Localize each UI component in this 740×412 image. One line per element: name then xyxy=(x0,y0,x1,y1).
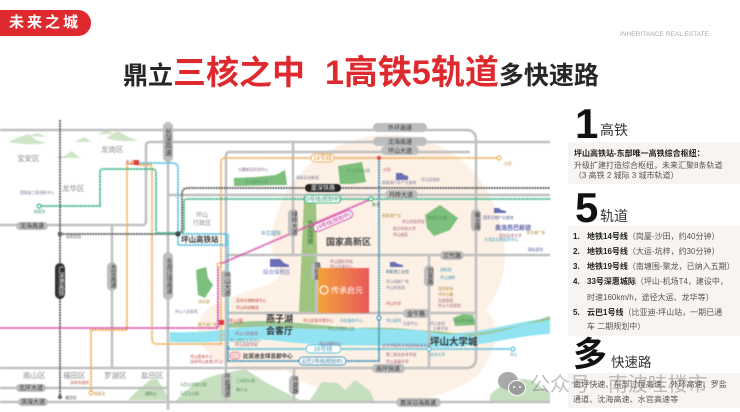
major place names xyxy=(181,224,531,348)
small point-of-interest labels: 南方科技大学 xyxy=(393,226,416,231)
highway labels: 北环大道 xyxy=(19,384,43,392)
small point-of-interest labels: 坪山实验学校 xyxy=(402,219,425,224)
small point-of-interest labels: 坪山校区 xyxy=(393,232,408,237)
icon: wechat xyxy=(498,372,526,396)
small point-of-interest labels: 坪山人民医院 xyxy=(438,303,461,308)
big number 5: 5 xyxy=(575,184,598,231)
small point-of-interest labels: 坪山森林公园 xyxy=(245,179,268,184)
district labels: 宝安区 xyxy=(17,153,40,163)
small point-of-interest labels: 坪山人民医院 xyxy=(175,309,198,314)
small point-of-interest labels: 大康学校 xyxy=(433,326,448,331)
line list: 时速160km/h，途径大运、龙华等） xyxy=(587,293,714,302)
description box: （3 高铁 2 城际 3 城市轨道） xyxy=(574,171,678,180)
small point-of-interest labels: 创新园 xyxy=(440,267,452,272)
district labels: 坪山 xyxy=(196,211,208,219)
small point-of-interest labels: 深圳技术大学 xyxy=(499,233,522,238)
small point-of-interest labels: 塘朗山 xyxy=(145,391,157,396)
highway labels: 坪山大道 xyxy=(388,147,412,155)
district labels xyxy=(17,144,211,380)
small point-of-interest labels: 新能源汽车产业基地 xyxy=(382,180,416,185)
small point-of-interest labels: 新能源工业园 xyxy=(386,269,409,274)
big character 多: 多 xyxy=(573,336,607,374)
small point-of-interest labels: 坪山科创集团 xyxy=(236,305,259,310)
line name tags xyxy=(55,154,354,365)
line list xyxy=(568,226,740,336)
small point-of-interest labels: 坪山奥体中心 xyxy=(190,354,213,359)
major place names: 会客厅 xyxy=(266,325,293,336)
map xyxy=(0,119,551,410)
highway labels: 金牛路 xyxy=(407,310,425,318)
small point-of-interest labels: 坪山人民医院 xyxy=(235,331,258,336)
district labels: 南山区 xyxy=(23,370,46,380)
highway labels: 丹梓大道 xyxy=(389,191,413,199)
line name tags: 16号线 xyxy=(314,345,332,353)
small point-of-interest labels: 深圳技术大学 xyxy=(408,343,431,348)
small point-of-interest labels: 岗厦北 xyxy=(94,391,106,396)
description box: 通道、沈海高速、水官高速等 xyxy=(573,395,678,404)
small point-of-interest labels: 马峦山公园 xyxy=(180,391,199,396)
highway labels: 聚龙路 xyxy=(473,212,480,231)
line name tags: 14号线 xyxy=(313,154,332,162)
highway labels: 锦绣路 xyxy=(313,261,320,281)
line name tags: 19号线(规划中) xyxy=(314,210,352,232)
small point-of-interest labels: 福田站 xyxy=(65,395,77,400)
BYD bubble: 比亚迪全球总部中心 xyxy=(243,352,293,360)
highway labels: 东部过境高速 xyxy=(165,257,172,295)
line list: 5. xyxy=(573,308,580,317)
small point-of-interest labels: 国家生物产业基地 xyxy=(483,215,514,220)
small point-of-interest labels: 龙光城广场 xyxy=(526,230,545,235)
district labels: 龙华区 xyxy=(62,183,85,193)
small point-of-interest labels: 沙田 xyxy=(504,161,512,166)
line name tags: 厦深铁路 xyxy=(311,184,335,192)
description box xyxy=(568,373,740,408)
metro line 14 xyxy=(91,158,499,393)
small point-of-interest labels: 坪山老街 xyxy=(430,321,445,326)
map: 大运 xyxy=(125,159,135,166)
small point-of-interest labels: 坪山区政府 xyxy=(421,177,440,182)
river xyxy=(170,316,550,347)
BYD bubble xyxy=(230,352,293,360)
small point-of-interest labels: 聚龙山公园 xyxy=(428,215,447,220)
line list: 2. xyxy=(573,247,580,256)
major place names: 奥浩芭巴斯德 xyxy=(495,224,531,232)
major place names: 燕子湖 xyxy=(266,313,293,324)
highway labels: 坪盐通道 xyxy=(223,372,230,398)
small point-of-interest labels xyxy=(20,161,545,400)
panel: high-speed rail xyxy=(568,100,740,184)
line list: 车 二期规划中） xyxy=(587,322,645,331)
watermark text: 公众号 · 南波哇楼市 xyxy=(530,374,708,396)
yunba line 1 xyxy=(228,158,379,361)
small point-of-interest labels: 坪山创新中心 xyxy=(319,341,342,346)
small point-of-interest labels: 聚龙 xyxy=(372,202,380,207)
small point-of-interest labels: 大鹏新区科创中心 xyxy=(238,167,269,172)
small point-of-interest labels: 坪山中学 xyxy=(386,301,401,306)
highway labels: 南坪快速 xyxy=(376,365,400,373)
small point-of-interest labels: 坪山高级中学 xyxy=(386,359,409,364)
highway labels: 兰竹路 xyxy=(443,252,461,260)
small point-of-interest labels: 高新区创新园 xyxy=(296,175,319,180)
highway labels: 创景路 xyxy=(426,266,433,286)
line name tags: 云巴1号线(规划中) xyxy=(301,358,343,365)
small point-of-interest labels: 东部中心 xyxy=(403,321,418,326)
english tagline: INHERITANCE REAL ESTATE xyxy=(620,31,709,38)
line list: 云巴1号线（比亚迪-坪山站，一期已通 xyxy=(587,308,722,317)
small point-of-interest labels: 坪山医院 xyxy=(386,318,401,323)
heading: 快速路: 快速路 xyxy=(611,355,652,370)
line name tags: 33号线(规划中) xyxy=(303,195,341,203)
small point-of-interest labels: 坪山创新广场 xyxy=(386,279,409,284)
small point-of-interest labels: 深圳市博物馆中心 xyxy=(236,298,267,303)
small point-of-interest labels: 坪环古寨 xyxy=(438,292,453,297)
highway labels: 惠深沿海高速 xyxy=(400,399,436,407)
small point-of-interest labels: 三洲田公园 xyxy=(236,378,255,383)
line list: 4. xyxy=(573,277,580,286)
small point-of-interest labels: 沙田 xyxy=(383,167,391,172)
small point-of-interest labels: 坪山文体中心 xyxy=(330,264,353,269)
header badge xyxy=(0,10,91,36)
small point-of-interest labels: 北京中医药大学 xyxy=(382,343,409,348)
small point-of-interest labels: 坪山国际学校 xyxy=(330,259,353,264)
district labels: 盐田区 xyxy=(141,370,164,380)
stations xyxy=(37,156,515,399)
ecological green corridor xyxy=(299,199,318,313)
description box xyxy=(568,142,740,184)
highway labels: 外环高速 xyxy=(388,124,412,132)
project block: 传承启元 xyxy=(318,268,369,313)
small point-of-interest labels: 坪山围 xyxy=(228,318,243,325)
highway labels: 沈海高速 xyxy=(388,138,412,146)
ridge bottom mountains xyxy=(128,369,550,402)
line list: 3. xyxy=(573,262,580,271)
small point-of-interest labels: 大湾区生物医药中心 xyxy=(484,237,518,242)
highway labels: 坪山大道 xyxy=(223,271,230,297)
district labels: 龙岗区 xyxy=(101,144,124,154)
rail lines xyxy=(0,120,550,397)
small point-of-interest labels: 坪山科技园 xyxy=(386,285,405,290)
small point-of-interest labels: 东部医院 xyxy=(438,298,453,303)
description box: 南坪快速、东部过境高速、外环高速、罗盐 xyxy=(573,380,727,389)
small point-of-interest labels: 中芯国际 xyxy=(261,230,281,237)
peach background area xyxy=(198,135,505,400)
metro line 16 xyxy=(137,163,513,349)
small point-of-interest labels: 坪心 xyxy=(510,352,518,357)
small point-of-interest labels: 梅沙山 xyxy=(236,387,248,392)
small point-of-interest labels: 新能源产业 xyxy=(382,213,401,218)
header badge: 未来之城 xyxy=(9,14,81,31)
small point-of-interest labels: 国际医院 xyxy=(528,247,543,252)
line name tags: 广深港高铁 xyxy=(57,265,64,297)
small point-of-interest labels: 马山岭公园 xyxy=(454,318,473,323)
line list: 地铁14号线（岗厦-沙田，约40分钟） xyxy=(587,232,719,241)
small point-of-interest labels: 第三职业技术学校 xyxy=(386,352,417,357)
district labels: 罗湖区 xyxy=(104,371,127,380)
description box: 坪山高铁站-东部唯一高铁综合枢纽： xyxy=(574,149,705,158)
highway labels: 坪葵路 xyxy=(291,375,298,395)
small point-of-interest labels: 坪山国际文化中心 xyxy=(230,338,261,343)
small point-of-interest labels: 马峦山郊野公园 xyxy=(180,382,207,387)
line list: 33号深惠城际（坪山-机场T4，建设中， xyxy=(587,277,728,286)
small point-of-interest labels: 坪山区图书馆中心 xyxy=(303,318,334,323)
major place names: 坪山大学城 xyxy=(430,336,478,348)
highway labels: 绿梓大道 xyxy=(290,210,297,236)
purple building icons xyxy=(270,173,506,267)
small point-of-interest labels: 深圳坪山体育(坪山) xyxy=(190,359,224,364)
small point-of-interest labels: 坪山丹梓公园 xyxy=(347,168,370,173)
line 33 xyxy=(39,169,550,233)
line list: 地铁19号线（南塘围-聚龙，已纳入五期） xyxy=(587,262,735,271)
small point-of-interest labels: 深圳市政府 xyxy=(70,380,89,385)
parks xyxy=(196,162,476,326)
small point-of-interest labels: 燕子湖广场 xyxy=(198,322,217,327)
watermark xyxy=(498,372,708,396)
mountains north-west xyxy=(8,130,138,158)
big number 1: 1 xyxy=(575,100,598,147)
small point-of-interest labels: 市民服务中心 xyxy=(340,318,363,323)
title: 鼎立三核之中 1高铁5轨道多快速路 xyxy=(123,54,599,92)
small point-of-interest labels: 坪山湖畔 xyxy=(440,275,455,280)
high speed rail xyxy=(60,120,550,397)
description box: 升级扩建打造综合枢纽，未来汇聚8条轨道 xyxy=(574,161,722,170)
highway labels xyxy=(19,124,480,407)
line list: 1. xyxy=(573,232,580,241)
heading: 高铁: 高铁 xyxy=(600,122,628,138)
heading: 轨道: 轨道 xyxy=(600,208,628,224)
district labels: 福田区 xyxy=(63,371,86,380)
small point-of-interest labels: 机荷东 xyxy=(34,209,46,214)
major place names: 坪山高铁站 xyxy=(181,234,219,244)
panel: metro lines xyxy=(568,184,740,336)
project block: 传承启元: 传承启元 xyxy=(331,285,363,295)
small point-of-interest labels: 坪山实验学校 xyxy=(235,342,258,347)
small point-of-interest labels: 深圳北站 xyxy=(66,234,81,239)
highway labels: 沈海高速 xyxy=(20,222,44,230)
small point-of-interest labels: 坪山河湿地公园 xyxy=(328,326,355,331)
small point-of-interest labels: 国家级工程创新中心 xyxy=(20,190,54,195)
small point-of-interest labels: 龙田老街 xyxy=(438,286,453,291)
highway pills xyxy=(16,122,481,407)
small point-of-interest labels: 技术大学 xyxy=(430,352,445,357)
ecological green corridor: 生态绿廊 xyxy=(306,219,313,245)
line list: 地铁16号线（大运-坑梓，约30分钟） xyxy=(587,247,719,256)
small point-of-interest labels: 汤坑湖 xyxy=(198,299,210,304)
major place names: 国家高新区 xyxy=(326,236,371,247)
panel: expressways xyxy=(568,336,740,408)
district labels: 行政区 xyxy=(193,219,211,227)
highway labels: 水官高速 xyxy=(109,263,116,289)
highways xyxy=(0,122,550,410)
small point-of-interest labels: 综合保税区 xyxy=(263,268,291,276)
highway labels: 长深高速 xyxy=(164,127,172,157)
highway labels: 滨海大道 xyxy=(21,398,45,406)
metro line 19 xyxy=(0,199,371,328)
